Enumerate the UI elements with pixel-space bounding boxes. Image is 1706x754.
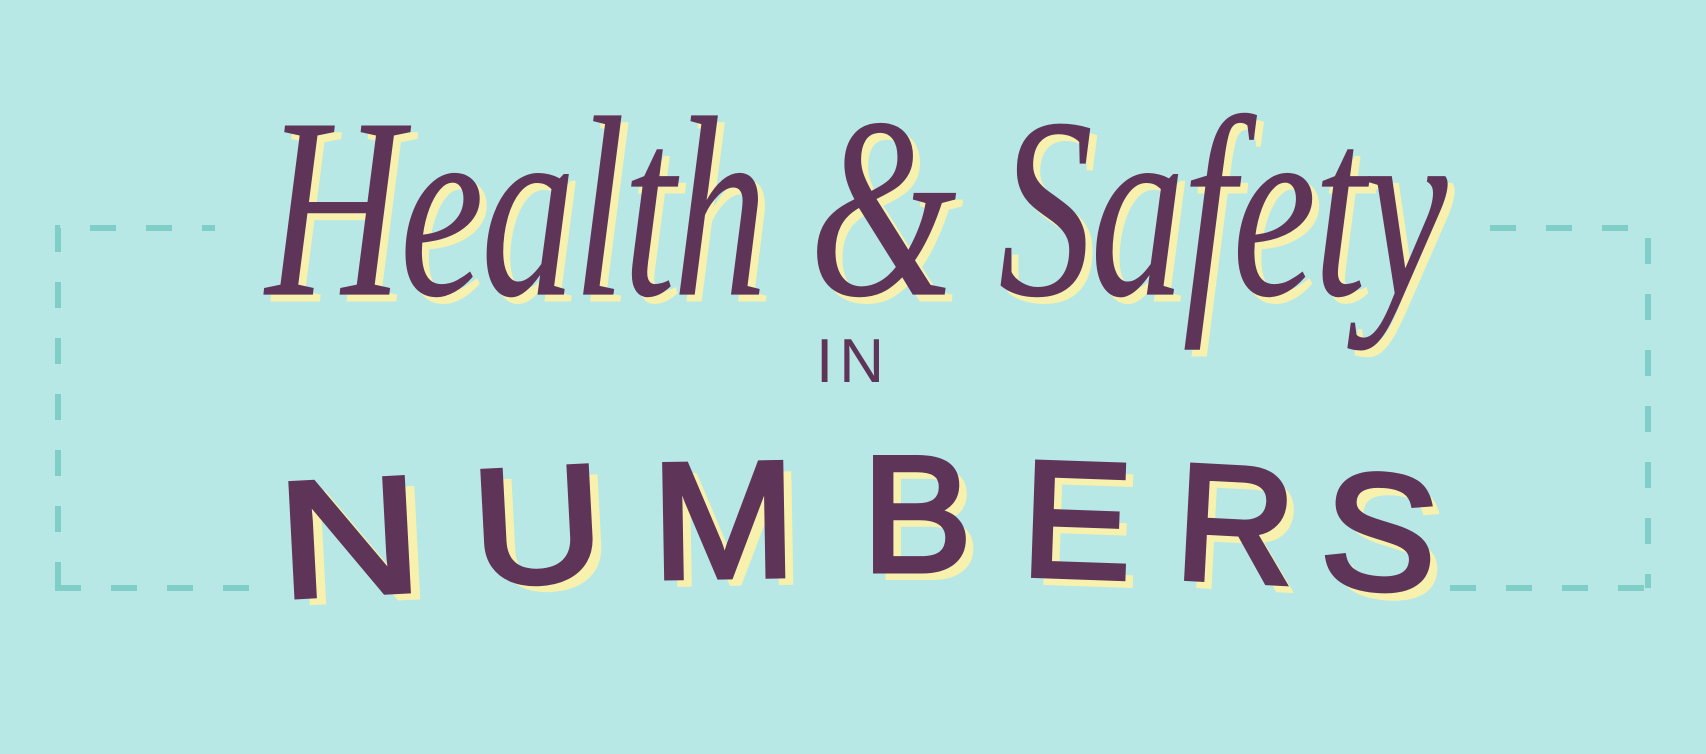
- heading: NUMBERS: U: [467, 430, 608, 620]
- heading: NUMBERS: S: [1314, 435, 1446, 629]
- heading: NUMBERS: B: [862, 422, 972, 606]
- heading: NUMBERS: E: [1019, 426, 1135, 614]
- heading: NUMBERS: N: [273, 441, 426, 633]
- heading: NUMBERS: M: [650, 427, 797, 613]
- title: Health & Safety: Health & Safety: [265, 66, 1445, 352]
- heading: NUMBERS: R: [1171, 429, 1300, 619]
- text: IN: IN: [816, 327, 890, 396]
